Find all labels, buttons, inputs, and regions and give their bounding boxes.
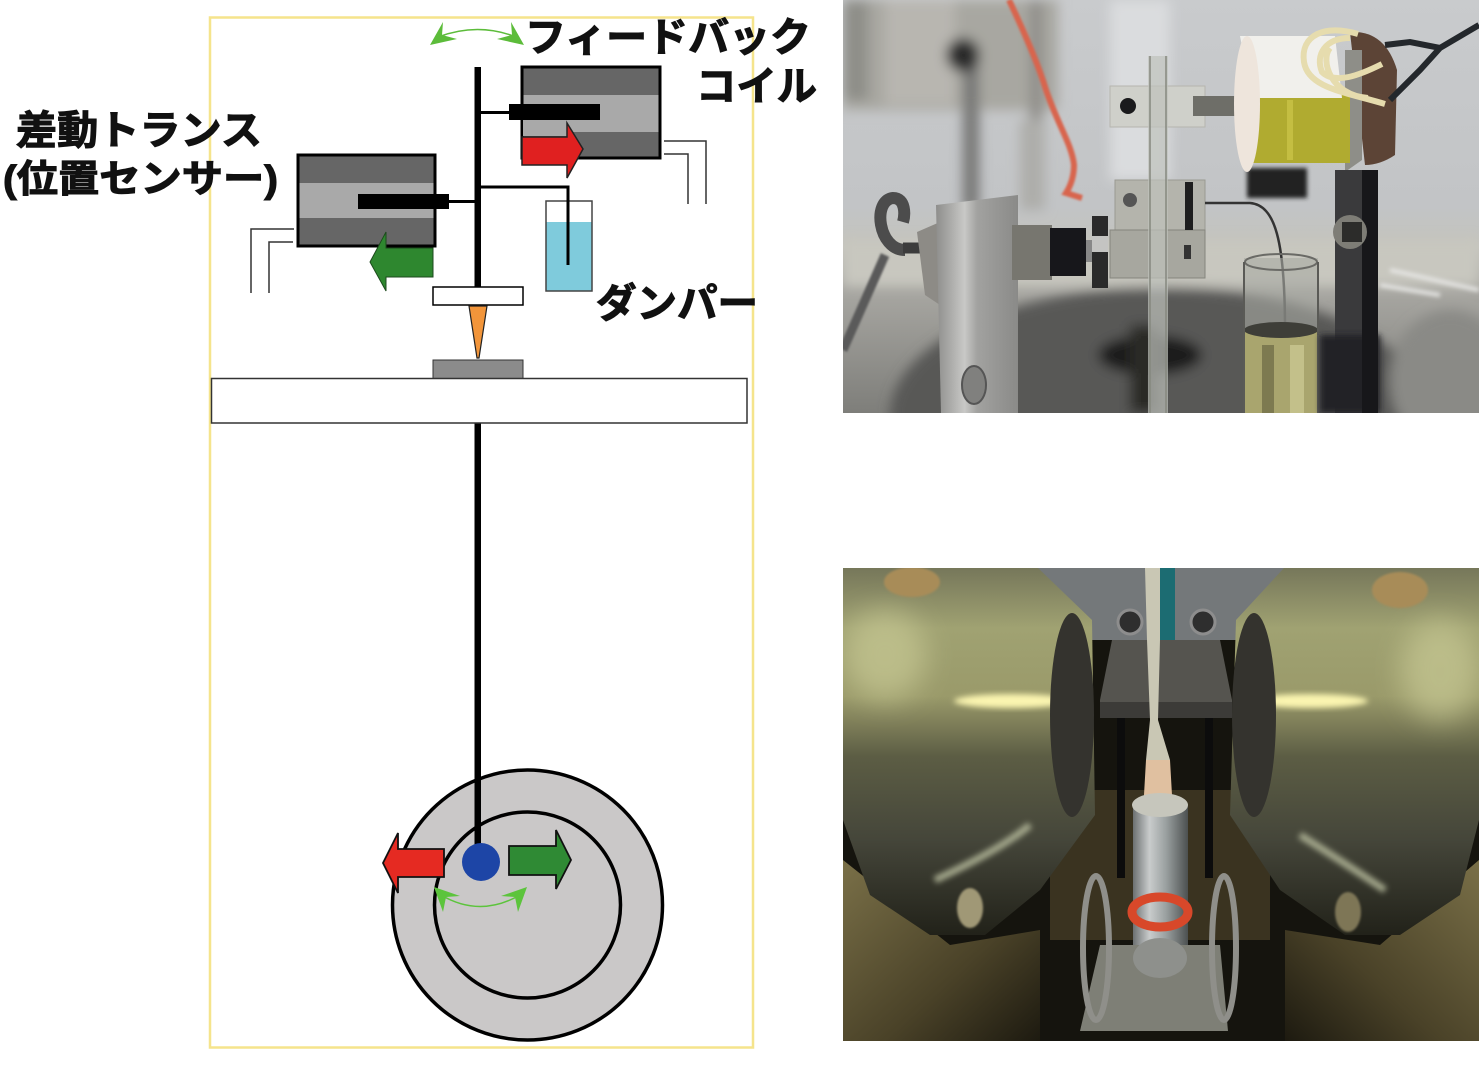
- black cables: [1385, 25, 1479, 100]
- green rotation arrow, top: [430, 22, 524, 45]
- centre backdrop: [1050, 790, 1270, 940]
- right magnet pole: [1230, 568, 1479, 935]
- green rotation arrow, sample: [434, 887, 527, 912]
- red wire: [1009, 0, 1082, 198]
- glass beaker photo: [1244, 254, 1318, 413]
- probe mount plate: [1100, 640, 1232, 878]
- blurred background hardware: [843, 0, 1479, 413]
- sample chamber rings: [392, 770, 662, 1040]
- damper beaker: [480, 187, 592, 291]
- rod lower end over chamber: [474, 765, 481, 849]
- differential transformer: [298, 155, 477, 246]
- sample tube: [1145, 568, 1170, 760]
- photo: sample between magnet poles: [843, 567, 1479, 1041]
- orange torsion fibre: [469, 306, 487, 358]
- tube connector: [1144, 760, 1172, 796]
- photo: coil and transformer assembly: [843, 0, 1479, 413]
- fibre base block: [433, 360, 523, 379]
- rim highlights: [1380, 270, 1479, 295]
- label: differential transformer (position sensor): 差動トランス: [16, 109, 262, 153]
- under-coil dark block: [1247, 168, 1307, 198]
- upper centre panel: [1035, 568, 1285, 640]
- torsion pendulum diagram: [212, 22, 747, 1040]
- feedback coil wires: [664, 141, 706, 204]
- label: feedback coil: [525, 16, 817, 109]
- black support post: [1320, 170, 1380, 413]
- thin sensor cable: [1205, 203, 1285, 330]
- label: feedback coil: コイル: [696, 65, 817, 109]
- feedback coil photo: [1234, 30, 1397, 172]
- orange O-ring: [1132, 897, 1188, 927]
- acrylic blocks and glass rod: [1110, 56, 1239, 413]
- green force arrow, sample: [509, 830, 571, 889]
- sample: blue dot: [462, 843, 500, 881]
- upper clamp plate: [433, 287, 523, 305]
- bracket with loop, nut: [843, 195, 1018, 413]
- diagram frame: [210, 18, 753, 1048]
- lower left pole body: [843, 860, 1040, 1041]
- green output arrow, transformer: [370, 232, 433, 291]
- feedback coil: [477, 67, 660, 158]
- label: differential transformer (position sensor): (位置センサー): [3, 159, 278, 201]
- label: differential transformer (position sensor): [3, 109, 278, 201]
- transformer wires: [251, 229, 294, 293]
- red force arrow, feedback coil: [522, 120, 583, 178]
- central rod: [474, 67, 481, 849]
- threaded collar: [1012, 216, 1108, 288]
- label: damper: ダンパー: [596, 282, 758, 326]
- label: feedback coil: フィードバック: [525, 16, 811, 60]
- silver cylinder: [1132, 793, 1188, 945]
- left magnet pole: [843, 567, 1095, 935]
- red force arrow, sample: [383, 833, 444, 893]
- base plate with chrome rails: [1080, 876, 1236, 1031]
- support bar: [212, 378, 747, 423]
- lower right pole body: [1285, 860, 1479, 1041]
